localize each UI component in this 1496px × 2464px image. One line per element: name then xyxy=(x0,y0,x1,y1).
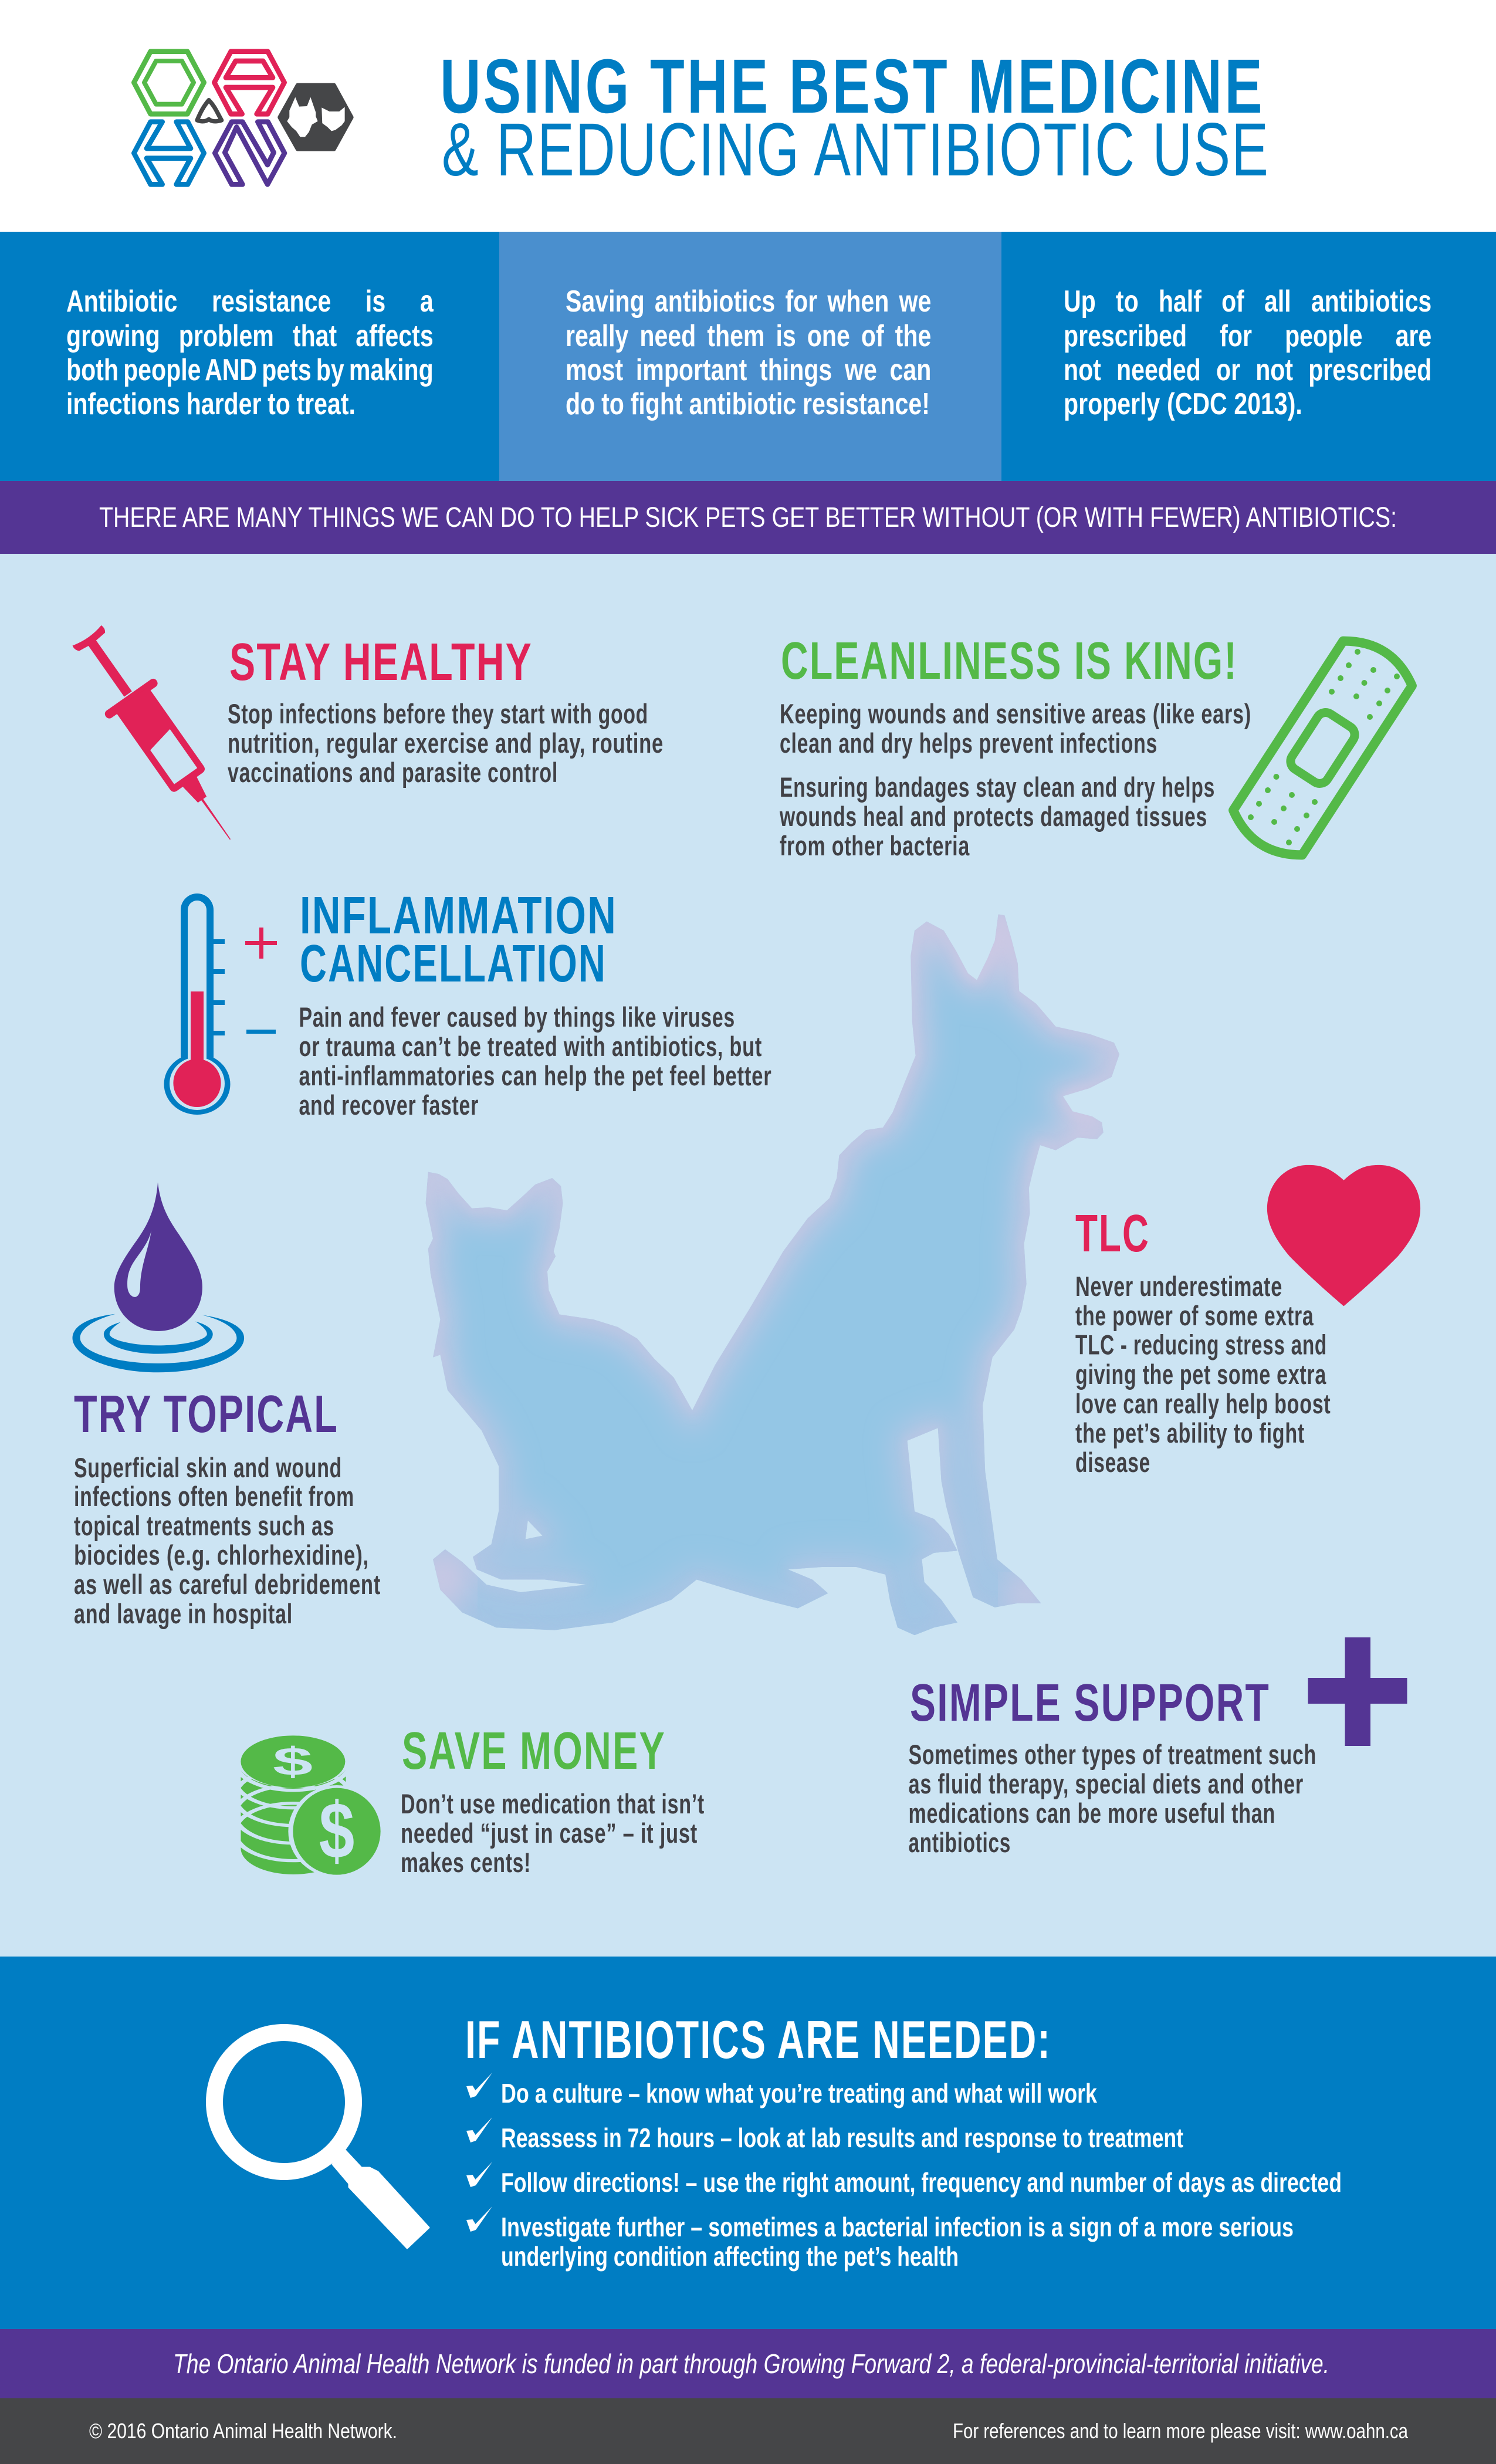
logo hexagon: N xyxy=(215,122,285,184)
heading: TLC xyxy=(1075,1204,1150,1263)
section: try topical xyxy=(72,1182,381,1629)
panel: antibiotic resistance intro: growing problem that affects xyxy=(66,319,434,353)
copyright: © 2016 Ontario Animal Health Network. xyxy=(89,2419,397,2443)
icon: water drop xyxy=(72,1182,244,1372)
icon: thermometer xyxy=(164,893,277,1115)
heading: STAY HEALTHY xyxy=(229,633,533,692)
body text: and lavage in hospital xyxy=(74,1598,293,1629)
body text: topical treatments such as xyxy=(74,1510,334,1541)
panel: antibiotic resistance intro xyxy=(0,232,499,481)
icon: syringe xyxy=(62,618,256,857)
check item 1: Do a culture – know what you’re treating and what will work xyxy=(501,2078,1097,2108)
panel: prescription statistic intro xyxy=(1001,232,1496,481)
section: inflammation cancellation xyxy=(164,886,772,1121)
panel: if antibiotics are needed xyxy=(0,1957,1496,2329)
section: TLC xyxy=(1075,1165,1420,1478)
body text: disease xyxy=(1075,1447,1150,1478)
body text: as fluid therapy, special diets and other xyxy=(908,1768,1304,1799)
body text: love can really help boost xyxy=(1075,1388,1331,1419)
body text: as well as careful debridement xyxy=(74,1569,381,1600)
panel: saving antibiotics intro: really need them is one of the xyxy=(566,319,931,353)
icon: bandage xyxy=(1226,629,1419,867)
body text xyxy=(1075,1271,1331,1478)
panel: prescription statistic intro: Up to half of all antibiotics xyxy=(1064,285,1431,319)
body text: the power of some extra xyxy=(1075,1300,1314,1331)
body text: Pain and fever caused by things like viruses xyxy=(299,1001,735,1033)
body text: Keeping wounds and sensitive areas (like ears) xyxy=(780,698,1251,729)
icon: coins xyxy=(235,1733,385,1877)
main light blue panel xyxy=(0,554,1496,1957)
check item 1 xyxy=(466,2073,1097,2108)
body text: medications can be more useful than xyxy=(908,1798,1275,1829)
logo hexagon: pets xyxy=(280,86,351,149)
panel: saving antibiotics intro: most important things we can xyxy=(566,353,931,387)
logo hexagon: H xyxy=(134,122,204,184)
body text: or trauma can’t be treated with antibiotics, but xyxy=(299,1031,762,1062)
panel: antibiotic resistance intro: both people AND pets by making xyxy=(66,353,434,387)
heading: CLEANLINESS IS KING! xyxy=(781,632,1238,691)
logo trefoil xyxy=(197,100,222,121)
body text xyxy=(74,1452,381,1629)
body text: vaccinations and parasite control xyxy=(228,757,558,788)
body text: infections often benefit from xyxy=(74,1481,354,1512)
check item 4 xyxy=(466,2206,1294,2272)
body text: needed “just in case” – it just xyxy=(401,1817,698,1849)
section: stay healthy xyxy=(62,618,664,857)
body text: Ensuring bandages stay clean and dry helps xyxy=(780,771,1215,803)
panel: saving antibiotics intro xyxy=(499,232,1001,481)
references: For references and to learn more please visit: www.oahn.ca xyxy=(953,2419,1409,2443)
section: cleanliness is king xyxy=(779,629,1419,867)
icon: heart xyxy=(1267,1165,1420,1306)
body text: anti-inflammatories can help the pet feel better xyxy=(299,1060,772,1091)
body text: Sometimes other types of treatment such xyxy=(908,1739,1316,1770)
body text: giving the pet some extra xyxy=(1075,1359,1326,1390)
heading: CANCELLATION xyxy=(300,935,607,993)
heading: IF ANTIBIOTICS ARE NEEDED: xyxy=(465,2011,1051,2070)
funding banner xyxy=(0,2329,1496,2398)
body text: biocides (e.g. chlorhexidine), xyxy=(74,1539,369,1571)
body text: wounds heal and protects damaged tissues xyxy=(779,801,1207,832)
body text xyxy=(908,1739,1316,1858)
body text: and recover faster xyxy=(299,1089,479,1121)
panel: saving antibiotics intro: do to fight antibiotic resistance! xyxy=(566,387,930,421)
logo hexagon: A xyxy=(214,52,285,114)
section: simple support xyxy=(908,1637,1407,1858)
body text: antibiotics xyxy=(908,1827,1011,1858)
heading xyxy=(300,886,617,993)
icon: plus xyxy=(1308,1637,1407,1746)
heading: SIMPLE SUPPORT xyxy=(910,1674,1270,1732)
body text xyxy=(779,698,1251,861)
body text: nutrition, regular exercise and play, routine xyxy=(228,727,664,759)
checklist xyxy=(466,2073,1342,2272)
body text: TLC - reducing stress and xyxy=(1075,1329,1327,1360)
icon: magnifying glass xyxy=(215,2032,429,2248)
cat and dog silhouette xyxy=(426,914,1119,1636)
check item 2 xyxy=(466,2117,1183,2153)
body text: Superficial skin and wound xyxy=(74,1452,342,1483)
panel: prescription statistic intro: prescribed for people are xyxy=(1064,319,1431,353)
intro band background xyxy=(0,232,1496,481)
check item 4: Investigate further – sometimes a bacterial infection is a sign of a more serious xyxy=(501,2212,1294,2242)
body text: makes cents! xyxy=(401,1847,531,1878)
body text: from other bacteria xyxy=(780,830,970,861)
body text: clean and dry helps prevent infections xyxy=(780,727,1157,759)
logo hexagon: O xyxy=(134,52,204,114)
panel: prescription statistic intro: properly (CDC 2013). xyxy=(1064,387,1302,421)
heading: TRY TOPICAL xyxy=(74,1385,339,1444)
panel: antibiotic resistance intro: Antibiotic resistance is a xyxy=(66,285,434,319)
body text: the pet’s ability to fight xyxy=(1075,1417,1305,1448)
icon: coins: $ xyxy=(319,1787,354,1876)
panel: saving antibiotics intro: Saving antibiotics for when we xyxy=(566,285,931,319)
header background xyxy=(0,0,1496,232)
check item 2: Reassess in 72 hours – look at lab results and response to treatment xyxy=(501,2123,1183,2153)
section: save money xyxy=(235,1722,705,1878)
check item 4: underlying condition affecting the pet’s health xyxy=(501,2241,959,2272)
heading: SAVE MONEY xyxy=(402,1722,666,1781)
body text xyxy=(401,1788,705,1878)
body text xyxy=(228,698,664,788)
logo: Ontario Animal Health Network xyxy=(134,52,351,184)
panel: antibiotic resistance intro: infections harder to treat. xyxy=(66,387,356,421)
body text: Stop infections before they start with good xyxy=(228,698,648,729)
icon: coins: $ xyxy=(273,1739,313,1783)
body text: Never underestimate xyxy=(1075,1271,1282,1302)
body text xyxy=(299,1001,772,1121)
title xyxy=(440,43,1270,192)
purple banner xyxy=(0,481,1496,554)
body text: Don’t use medication that isn’t xyxy=(401,1788,705,1819)
panel: prescription statistic intro: not needed or not prescribed xyxy=(1064,353,1431,387)
footer xyxy=(0,2398,1496,2464)
heading: INFLAMMATION xyxy=(300,886,617,945)
